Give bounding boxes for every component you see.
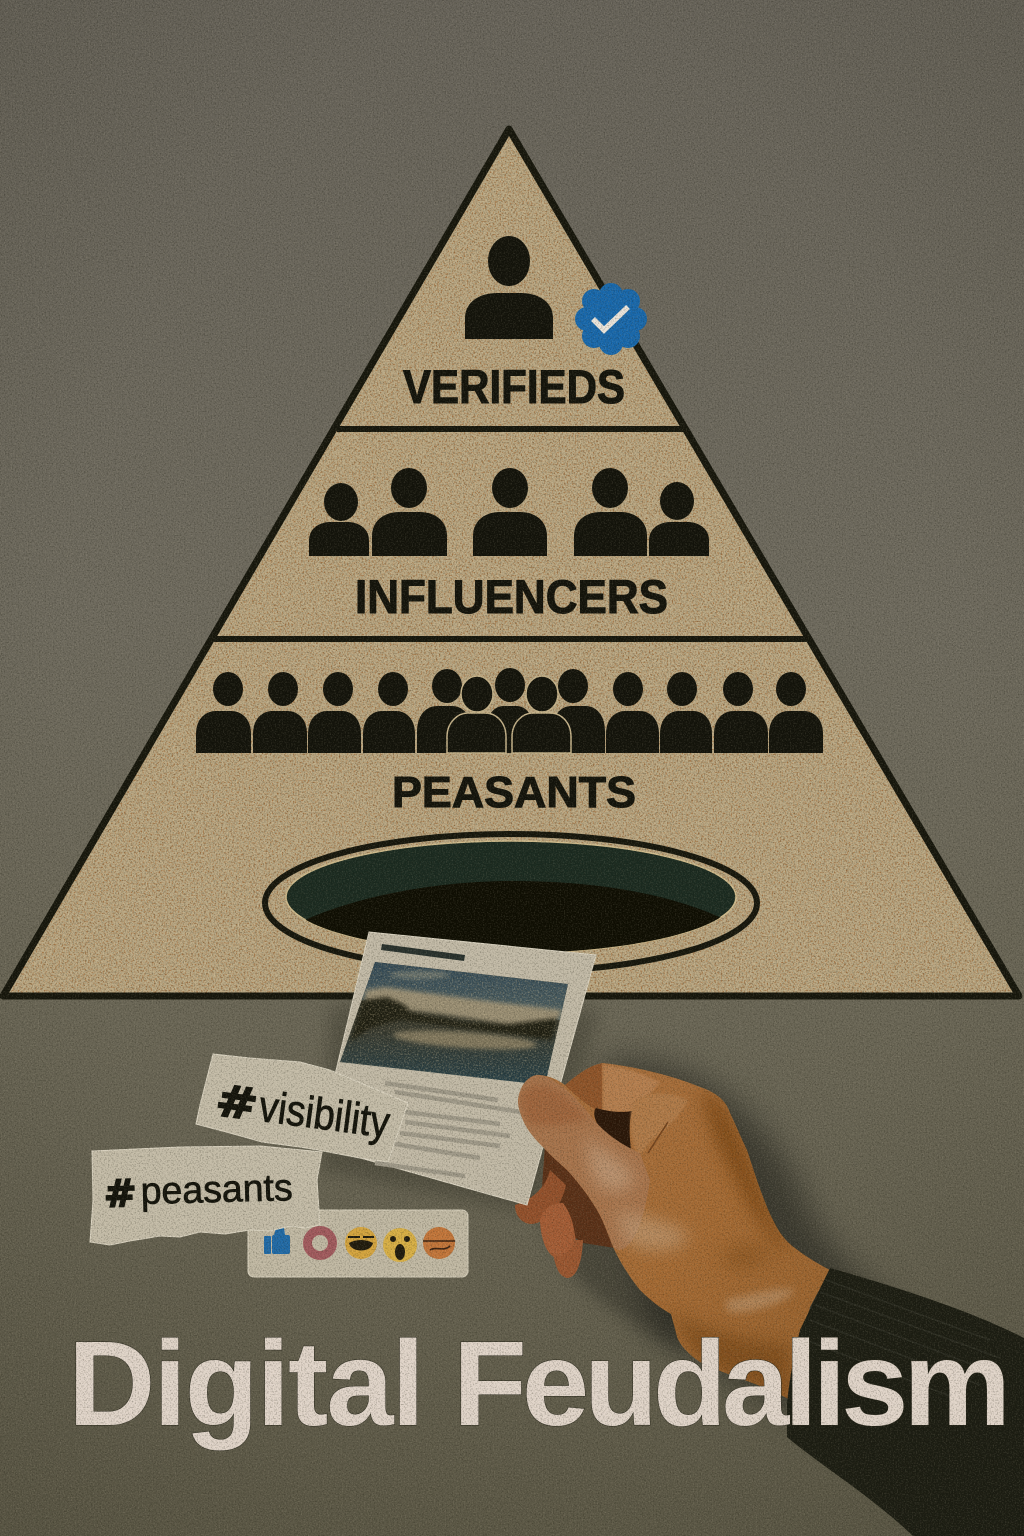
icon: verified badge: [575, 283, 647, 355]
title word: Digital: Digital: [68, 1315, 425, 1451]
visibility paper: [196, 1054, 408, 1162]
thumb: [518, 1075, 650, 1250]
reaction bar panel: [248, 1210, 468, 1277]
card paper: [318, 932, 596, 1205]
pyramid: [0, 120, 1024, 1000]
label: peasants: PEASANTS: [392, 768, 636, 817]
post text lines: [375, 1083, 527, 1176]
pyramid body: [3, 129, 1019, 996]
icon: wow reaction: [383, 1228, 417, 1262]
icon: angry reaction: [423, 1227, 455, 1259]
thumb highlight: [585, 1135, 635, 1192]
finger three: [553, 1240, 583, 1278]
pyramid outline: [3, 129, 1019, 996]
sleeve fabric: [787, 1268, 1024, 1536]
icon: laugh reaction: [345, 1227, 377, 1259]
palm shadow: [540, 1145, 615, 1248]
visibility text: [213, 1075, 393, 1149]
lower hand shading: [674, 1315, 792, 1397]
wrist fold: [724, 1244, 762, 1268]
hand shadow side: [700, 1090, 790, 1250]
pyramid texture: [0, 120, 1024, 1000]
peasants paper: [90, 1146, 322, 1245]
peasants text: #: [103, 1171, 137, 1216]
hand details: [518, 1063, 795, 1400]
icons: peasant crowd: [196, 668, 823, 753]
tag: #peasants: [90, 1146, 322, 1245]
icon: thumbs up: [264, 1228, 290, 1254]
label: verifieds: VERIFIEDS: [403, 360, 625, 413]
tier: verifieds: [403, 236, 647, 413]
reaction bar: [248, 1210, 468, 1277]
finger gap: [594, 1108, 632, 1150]
title: [68, 1315, 1011, 1451]
icon: verified person: [465, 236, 553, 339]
icons: influencer people: [309, 468, 709, 556]
finger two: [540, 1203, 576, 1258]
hole: [265, 834, 757, 972]
thumb tip shading: [520, 1085, 588, 1125]
hole opening: [286, 841, 736, 953]
icon: love reaction: [308, 1230, 332, 1256]
post title bar: [381, 944, 465, 961]
hole outer ring: [265, 834, 757, 972]
hole depth: [305, 881, 720, 952]
index finger: [603, 1065, 660, 1112]
tag: #visibility: [196, 1054, 408, 1162]
hand silhouette: [518, 1063, 830, 1400]
second finger: [631, 1094, 688, 1155]
wrist highlight: [725, 1289, 795, 1313]
peasants text: peasants: [140, 1167, 293, 1213]
title word: Feudalism: Feudalism: [453, 1315, 1011, 1451]
post photo: [340, 962, 568, 1083]
icon: hand holding post: [518, 1063, 830, 1400]
label: influencers: INFLUENCERS: [355, 570, 668, 623]
social post card: [318, 932, 596, 1205]
knuckle crease: [648, 1122, 668, 1153]
icon: lower fingers: [515, 1145, 615, 1278]
visibility text: #: [213, 1075, 261, 1131]
palm highlight: [615, 1210, 690, 1251]
shadow under hand and post: [320, 1005, 910, 1420]
visibility text: visibility: [256, 1082, 393, 1148]
inner fingers: [565, 1063, 602, 1112]
sleeve: [787, 1268, 1024, 1536]
sleeve ribs: [806, 1280, 1000, 1400]
finger one: [515, 1170, 566, 1224]
tier divider: upper: [337, 426, 685, 432]
tier: peasants: [196, 668, 823, 817]
tier divider: lower: [214, 636, 808, 642]
tier: influencers: [309, 468, 709, 623]
